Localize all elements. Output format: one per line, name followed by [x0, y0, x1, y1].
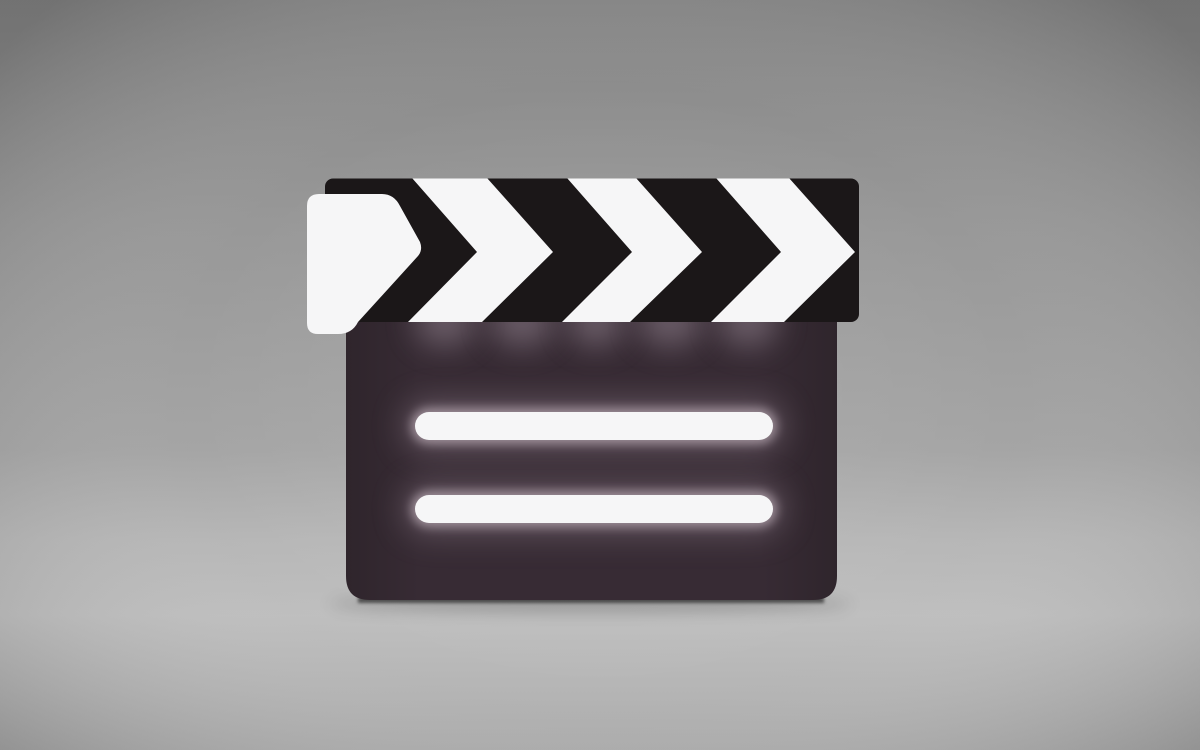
- clapperboard body: [346, 298, 837, 600]
- white corner tab: [307, 194, 421, 334]
- stripe 1: [408, 178, 553, 322]
- floor shadow: [328, 596, 852, 612]
- clapper stick: [307, 178, 859, 334]
- text line 2: [415, 495, 773, 523]
- glow around text lines: [404, 402, 784, 533]
- glow under stripes: [406, 322, 788, 358]
- stripe 3: [711, 178, 855, 322]
- text line 1: [415, 412, 773, 440]
- stripe 2: [562, 178, 702, 322]
